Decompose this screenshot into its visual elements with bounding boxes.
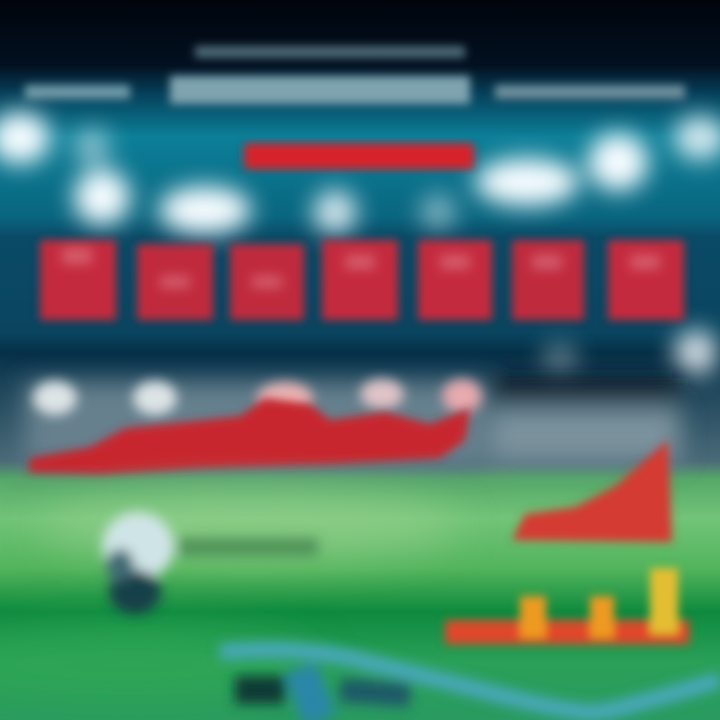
stat card highlights xyxy=(62,248,660,288)
red area chart xyxy=(28,398,470,474)
red area chart: right xyxy=(512,440,672,542)
row of seven red stat cards xyxy=(40,240,684,320)
pitch glow xyxy=(0,490,460,705)
red heading banner xyxy=(244,143,474,169)
title block xyxy=(25,46,685,104)
bar chart: orange and yellow bars xyxy=(445,568,689,644)
stat card 3 xyxy=(230,244,304,320)
stands panel behind the area chart xyxy=(25,378,680,467)
icon: football xyxy=(102,512,318,614)
blue swoosh at the bottom xyxy=(220,650,720,720)
stat card 5 xyxy=(418,240,492,320)
chart marker lights xyxy=(33,379,482,415)
stat card 7 xyxy=(608,240,684,320)
stat card 2 xyxy=(137,244,213,320)
stat card 1 xyxy=(40,240,116,320)
stat card 4 xyxy=(322,240,398,320)
stadium floodlights xyxy=(0,112,720,378)
stat card 6 xyxy=(512,240,584,320)
